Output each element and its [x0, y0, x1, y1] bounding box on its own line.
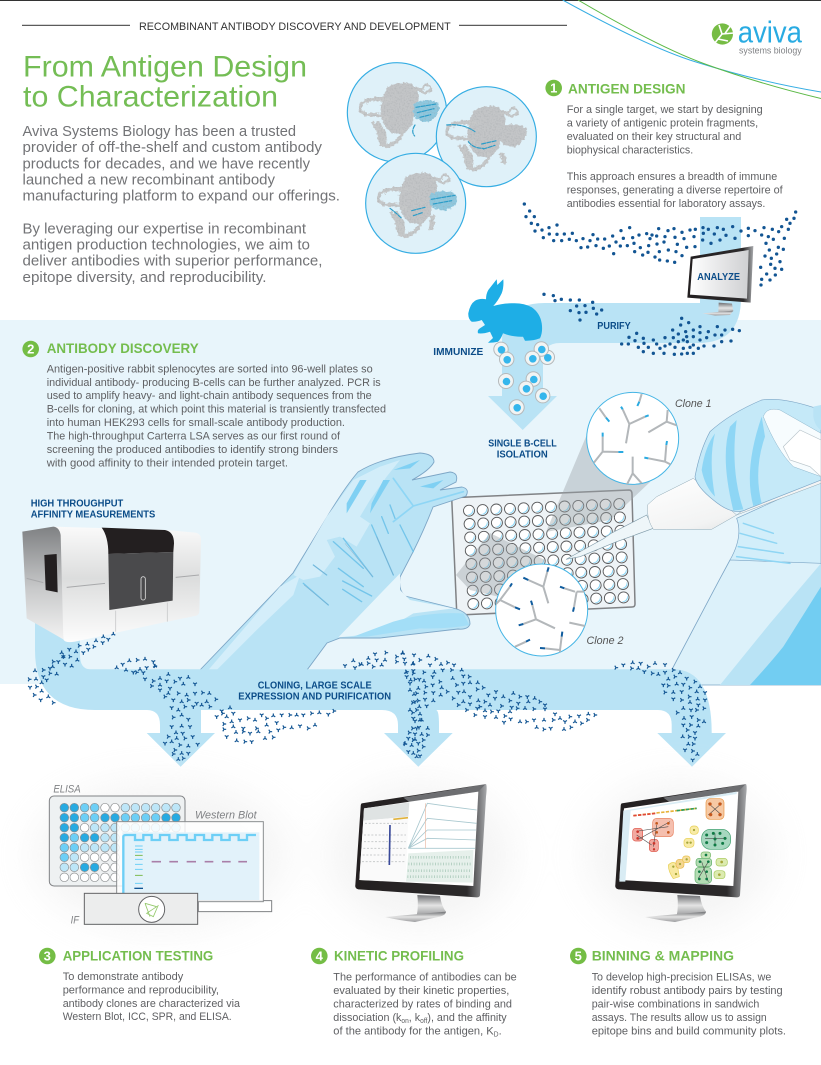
- heading: ANTIGEN DESIGN: [568, 80, 686, 96]
- title: [23, 51, 307, 114]
- label: analyze: ANALYZE: [697, 272, 740, 283]
- body text: Western Blot, ICC, SPR, and ELISA.: [63, 1011, 232, 1023]
- number badge 1: 1: [550, 81, 557, 96]
- ELISA plate: [49, 796, 185, 886]
- label: cloning, large scale expression and purification: EXPRESSION AND PURIFICATION: [238, 691, 391, 702]
- flow: cloning, expression and purification arrows: [35, 610, 726, 767]
- wrist folds: [730, 480, 821, 563]
- pipette tip: [566, 515, 653, 559]
- label: single B-cell isolation: SINGLE B-CELL: [488, 439, 557, 450]
- number badge 3: 3: [44, 949, 51, 964]
- body text: [592, 972, 786, 1037]
- body text: antibodies essential for laboratory assays.: [567, 198, 765, 210]
- label: clone 1: Clone 1: [675, 398, 712, 410]
- body text: [333, 972, 517, 1038]
- heading: APPLICATION TESTING: [63, 948, 213, 964]
- sleeve: [672, 553, 821, 685]
- soft shadows under products: [35, 785, 770, 925]
- logo: aviva systems biology: aviva: [738, 15, 803, 50]
- intro text block: manufacturing platform to expand our offerings.: [22, 188, 340, 205]
- body text: of the antibody for the antigen, K: [333, 1025, 498, 1037]
- intro text block: deliver antibodies with superior performance,: [22, 253, 322, 270]
- body text: B-cells for cloning, at which point this material is transiently transfected: [47, 404, 386, 416]
- antigen circle 2: [436, 87, 536, 187]
- protein dots stream upper: [524, 204, 796, 285]
- clone zoom circles: [495, 392, 679, 658]
- body text: off: [420, 1018, 427, 1025]
- intro text block: By leveraging our expertise in recombinant: [22, 220, 307, 237]
- antigen circle 1: [347, 63, 447, 162]
- body text: For a single target, we start by designing: [567, 104, 763, 116]
- heading: BINNING & MAPPING: [592, 948, 734, 964]
- body text: [63, 971, 241, 1023]
- well plate: [452, 490, 635, 615]
- label: single B-cell isolation: [488, 439, 557, 460]
- left glove hand: [200, 453, 470, 670]
- label IF: IF: [71, 914, 80, 926]
- section 1: antigen design: [545, 80, 783, 210]
- intro text block: launched a new recombinant antibody: [22, 172, 275, 188]
- body text: into human HEK293 cells for small-scale antibody production.: [47, 417, 345, 429]
- number badge 2: 2: [27, 342, 34, 357]
- body text: with good affinity to their intended protein target.: [46, 458, 288, 470]
- intro text block: antigen production technologies, we aim to: [22, 236, 310, 254]
- Western blot: [117, 822, 272, 912]
- pipette body: [647, 478, 821, 529]
- label: high throughput affinity: HIGH THROUGHPUT: [31, 499, 123, 510]
- network nodes: [655, 802, 722, 834]
- antigen structure circles: [347, 63, 536, 253]
- label: high throughput affinity: AFFINITY MEASUREMENTS: [31, 509, 156, 520]
- IF slide: [84, 893, 198, 924]
- number badge 3: [39, 948, 56, 964]
- body text: .: [499, 1025, 502, 1037]
- instrument: Carterra LSA: [22, 527, 201, 642]
- body text: [567, 104, 783, 210]
- panel: discovery background band: [0, 320, 821, 684]
- screen sidebar: [619, 792, 737, 882]
- body text: used to amplify heavy- and light-chain antibody sequences from the: [47, 390, 372, 402]
- icon: green leaf: [712, 23, 734, 45]
- number badge 2: [22, 341, 39, 357]
- icon: analyze monitor: [687, 246, 753, 316]
- body text: assays. The results allow us to assign: [592, 1012, 767, 1024]
- body text: performance and reproducibility,: [63, 984, 219, 996]
- body text: The performance of antibodies can be: [333, 972, 517, 984]
- antigen circle 3: [366, 153, 466, 253]
- gloved fist: [695, 399, 821, 512]
- body text: This approach ensures a breadth of immune: [567, 171, 777, 183]
- logo: aviva systems biology: systems biology: [739, 45, 802, 56]
- body text: ), and the affinity: [427, 1012, 507, 1024]
- intro text block: epitope diversity, and reproducibility.: [22, 269, 266, 286]
- body text: epitope bins and build community plots.: [592, 1025, 786, 1037]
- label: high throughput affinity: [31, 499, 156, 520]
- body text: The high-throughput Carterra LSA serves as our first round of: [47, 431, 341, 443]
- number badge 4: [311, 948, 328, 964]
- heading: KINETIC PROFILING: [334, 948, 464, 964]
- body text: antibody clones are characterized via: [63, 998, 241, 1010]
- body text: Antigen-positive rabbit splenocytes are sorted into 96-well plates so: [47, 363, 373, 375]
- body text: individual antibody- producing B-cells can be further analyzed. PCR is: [47, 377, 381, 389]
- label: clone 2: Clone 2: [586, 635, 624, 647]
- right glove and pipette: [566, 399, 821, 685]
- number badge 5: [570, 948, 587, 964]
- number badge 5: 5: [575, 949, 582, 964]
- heading: ANTIBODY DISCOVERY: [47, 340, 199, 356]
- body text: [46, 363, 386, 470]
- title: to Characterization: [23, 80, 278, 114]
- number badge 4: 4: [316, 949, 324, 964]
- label: cloning, large scale expression and purification: [238, 680, 391, 702]
- body text: evaluated by their kinetic properties,: [333, 985, 509, 997]
- body text: a variety of antigenic protein fragments,: [567, 117, 758, 129]
- network edges: [637, 803, 727, 882]
- antibody particles streams: [29, 634, 705, 760]
- projection cones: [456, 432, 650, 600]
- body text: D: [494, 1031, 499, 1038]
- body text: To demonstrate antibody: [63, 971, 184, 983]
- number badge 1: [545, 80, 562, 96]
- arrow: analyze to immunize flow: [488, 217, 741, 430]
- intro text block: Aviva Systems Biology has been a trusted: [22, 123, 296, 140]
- label: purify: PURIFY: [597, 321, 631, 332]
- application testing illustration: [49, 784, 272, 926]
- body text: characterized by rates of binding and: [333, 998, 512, 1010]
- community clusters: [633, 799, 731, 883]
- clone 2 circle: [495, 564, 588, 658]
- monitor: kinetic profiling: [355, 784, 487, 922]
- label ELISA: ELISA: [53, 784, 81, 796]
- label: immunize: IMMUNIZE: [433, 347, 484, 358]
- intro text block: provider of off-the-shelf and custom antibody: [22, 139, 323, 156]
- body text: on: [401, 1018, 409, 1025]
- legend ticks: [633, 808, 697, 816]
- B-cells: [494, 342, 554, 415]
- section 4: kinetic profiling: [311, 948, 517, 1038]
- body text: To develop high-precision ELISAs, we: [592, 972, 771, 984]
- title: From Antigen Design: [23, 51, 307, 84]
- top rule: [0, 0, 821, 1]
- body text: pair-wise combinations in sandwich: [592, 998, 759, 1010]
- protein dots stream lower: [544, 294, 739, 354]
- clone 1 circle: [587, 392, 679, 485]
- label Western Blot: Western Blot: [195, 810, 258, 822]
- section 5: binning and mapping: [570, 948, 786, 1037]
- header strap: RECOMBINANT ANTIBODY DISCOVERY AND DEVELOPMENT: [139, 21, 451, 33]
- body text: , k: [409, 1012, 420, 1024]
- label: cloning, large scale expression and purification: CLONING, LARGE SCALE: [258, 680, 372, 691]
- section 2: antibody discovery: [22, 340, 386, 470]
- decorative curves: [563, 0, 821, 98]
- label: single B-cell isolation: ISOLATION: [497, 449, 548, 460]
- logo: aviva systems biology: [712, 15, 803, 56]
- body text: dissociation (k: [333, 1012, 405, 1024]
- body text: biophysical characteristics.: [567, 144, 693, 156]
- body text: screening the produced antibodies to identify strong binders: [47, 444, 338, 456]
- monitor: binning and mapping: [615, 784, 747, 922]
- body text: evaluated on their key structural and: [567, 131, 741, 143]
- icon: rabbit: [468, 279, 542, 343]
- intro text block: products for decades, and we have recently: [22, 155, 310, 172]
- intro text block: [22, 123, 340, 286]
- section 3: application testing: [39, 948, 241, 1023]
- body text: responses, generating a diverse repertoire of: [567, 185, 783, 197]
- body text: identify robust antibody pairs by testing: [592, 985, 783, 997]
